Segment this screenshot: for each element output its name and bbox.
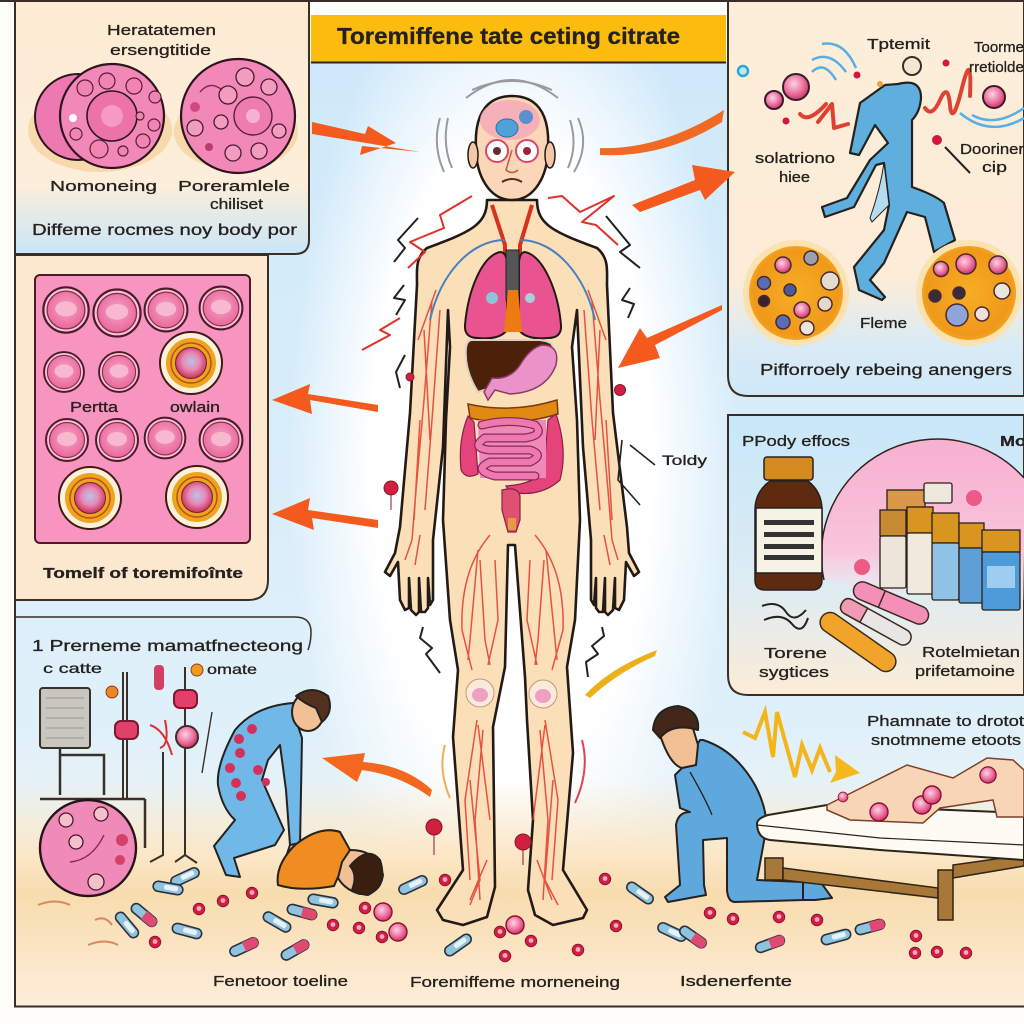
iv poles (106, 665, 212, 863)
yellow pain zigzag (743, 712, 860, 783)
walking figure (822, 83, 955, 300)
heading: medications right: Mo (1000, 433, 1024, 450)
capsules (816, 579, 931, 675)
panel: bottom right scene (653, 706, 1024, 920)
arrow: yellow streak (585, 650, 657, 698)
panel: cell comparison (15, 1, 309, 254)
knees (466, 679, 557, 708)
label: right of figure (960, 141, 1024, 176)
heading: bottom left: 1 Prerneme mamatfnecteong (32, 638, 303, 655)
head (468, 96, 555, 200)
panel: walking side effects (728, 2, 1024, 396)
white glow around body (287, 0, 737, 980)
orange cell left (743, 240, 849, 346)
caption: walking panel: Pifforroely rebeing anengers (760, 362, 1012, 379)
label: left capsules: sygtices (759, 664, 829, 681)
label: left of figure: solatriono (755, 150, 835, 167)
label: right pole: omate (207, 661, 257, 677)
label: right bottles (915, 644, 1020, 680)
arrow: from right panel (618, 305, 722, 368)
seated man (653, 706, 832, 902)
pins on body (384, 373, 626, 865)
heading: cell comparison: Heratatemen (107, 22, 216, 39)
label: ring tablet: owlain (170, 399, 220, 416)
tablets row one (43, 287, 242, 337)
bed (757, 805, 1024, 920)
icon: normal cells (28, 64, 172, 172)
label: left machine: c catte (43, 660, 102, 676)
motion arcs around head (437, 80, 583, 172)
central sky backdrop (16, 62, 1024, 882)
title banner (311, 2, 726, 62)
large bottle (755, 457, 822, 590)
panel: tablet sheet (15, 255, 268, 600)
arrow: head right (600, 110, 724, 155)
bottom labels: Foremiffeme morneneing (410, 974, 620, 991)
stomach (484, 345, 557, 400)
liver (466, 340, 553, 392)
label: right of figure: cip (982, 159, 1007, 176)
kneeling man (214, 690, 330, 877)
label: abnormal cell (178, 178, 290, 213)
body figure (385, 80, 639, 925)
title banner: Toremiffene tate ceting citrate (337, 23, 680, 49)
lightning and side marks (362, 196, 655, 803)
bottom labels: Fenetoor toeline (213, 973, 348, 990)
tablets row three (46, 418, 242, 461)
lying figure (827, 758, 1024, 823)
label: body: Toldy (662, 452, 707, 468)
label: left of figure: hiee (779, 169, 810, 186)
label: right bottles: Rotelmietan (922, 644, 1020, 661)
arrow: to tablet sheet upper (272, 384, 378, 414)
lying person (278, 830, 383, 895)
wave icons and balls (738, 44, 1024, 173)
labels: cell types: Nomoneing (50, 178, 157, 195)
labels: tablet sheet: Pertta (70, 399, 119, 416)
label: right of figure: Dooriner (960, 141, 1024, 158)
small bottles (880, 483, 1020, 610)
small intestine (478, 420, 546, 478)
ring tablets (59, 332, 228, 529)
pink tablet sheet (35, 275, 250, 543)
body silhouette (385, 200, 639, 925)
icon: abnormal cell (174, 59, 298, 173)
heading: cell comparison: ersengtitide (110, 42, 211, 59)
label: top right: Toorme (974, 39, 1024, 56)
arrow: to top right panel (632, 165, 735, 212)
tablets row two (44, 352, 139, 392)
large intestine (460, 400, 563, 532)
bottom labels: Isdenerfente (680, 973, 792, 990)
label: top right: rretiolde (969, 59, 1024, 76)
lungs (465, 252, 561, 338)
arrow: to kneeling figure (322, 753, 432, 797)
icon: squiggles (762, 604, 808, 629)
caption: bottom right: snotmneme etoots (871, 732, 1021, 749)
caption: bottom right: Phamnate to drotot (867, 713, 1024, 730)
panel: medications (728, 415, 1024, 695)
heading: medications: PPody effocs (742, 433, 850, 450)
label: left capsules (759, 645, 829, 681)
blue vessels (430, 240, 595, 320)
pink dome (821, 439, 1024, 600)
label: abnormal cell: chiliset (210, 196, 264, 213)
arrows (272, 110, 735, 797)
trachea and mediastinum (504, 250, 522, 332)
label: left capsules: Torene (764, 645, 827, 662)
bottom labels (213, 973, 792, 991)
heading: cell comparison (107, 22, 216, 59)
orange cell right (916, 240, 1022, 346)
label: flame: Fleme (860, 315, 907, 332)
scattered pills on ground (114, 866, 972, 962)
panel: bottom left scene (15, 617, 383, 945)
arrow: to head left (312, 122, 420, 155)
caption: tablet sheet: Tomelf of toremifoînte (43, 565, 243, 582)
large pink cell (40, 800, 136, 896)
arrow: to tablet sheet lower (272, 498, 378, 530)
caption: bottom right (867, 713, 1024, 749)
caption: cell comparison: Diffeme rocmes noy body por (32, 222, 298, 239)
ground strokes (38, 902, 118, 945)
machine (40, 688, 145, 848)
label: abnormal cell: Poreramlele (178, 178, 290, 195)
label: right pole (191, 661, 257, 677)
label: right bottles: prifetamoine (915, 663, 1015, 680)
labels: walking panel: Tptemit (867, 36, 931, 53)
veins neck (492, 205, 532, 255)
sandy ground (16, 780, 1024, 1006)
veins arms and legs (405, 290, 618, 905)
dome spots (854, 490, 982, 575)
label: left of figure (755, 150, 835, 186)
label: top right (969, 39, 1024, 76)
